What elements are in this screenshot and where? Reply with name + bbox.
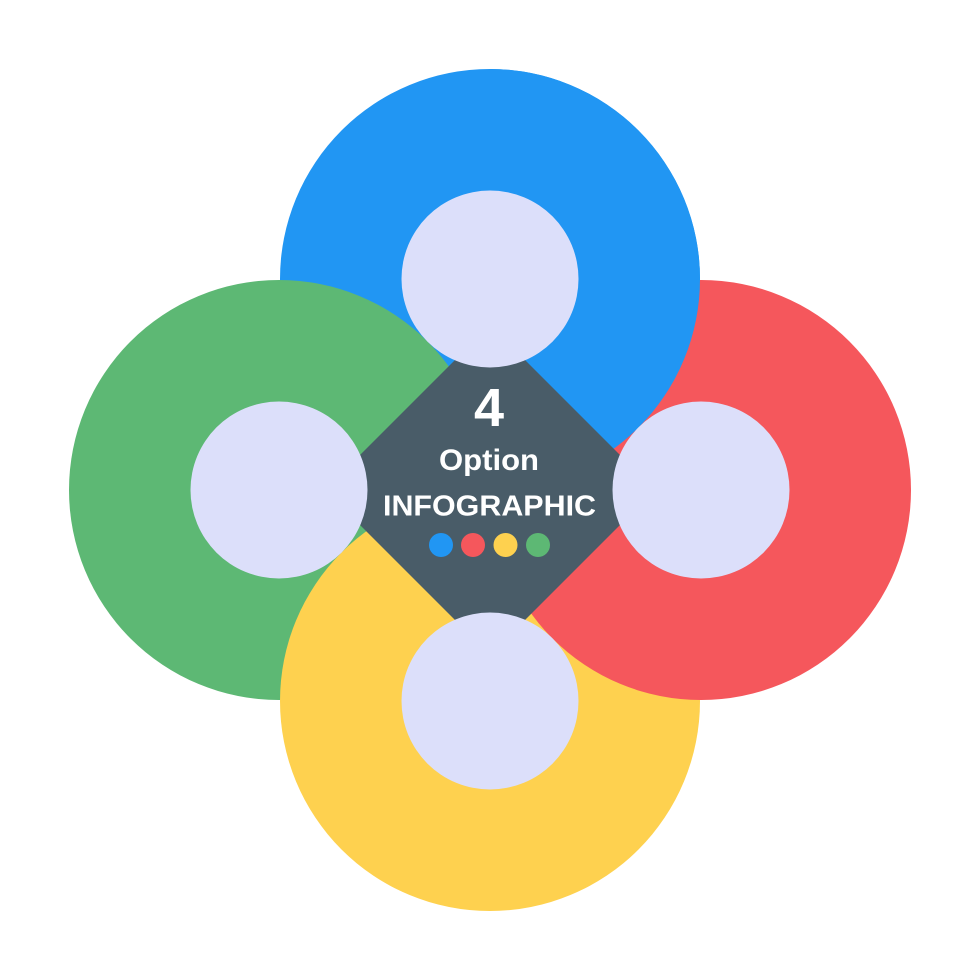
blue circle overlap over red (491, 69, 700, 449)
infographic (69, 69, 911, 911)
inner circle: right (612, 402, 790, 578)
number 4: 4 (474, 378, 504, 438)
inner circle: top (402, 190, 578, 368)
heading: Option: Option (439, 444, 539, 477)
green circle (69, 280, 489, 700)
heading: INFOGRAPHIC: INFOGRAPHIC (383, 490, 596, 522)
inner circle: left (190, 402, 368, 578)
center diamond (325, 325, 655, 655)
blue circle (280, 69, 700, 489)
inner circle: bottom (402, 612, 578, 790)
red circle (491, 280, 911, 700)
yellow circle (280, 491, 700, 911)
colour dots (429, 533, 550, 557)
